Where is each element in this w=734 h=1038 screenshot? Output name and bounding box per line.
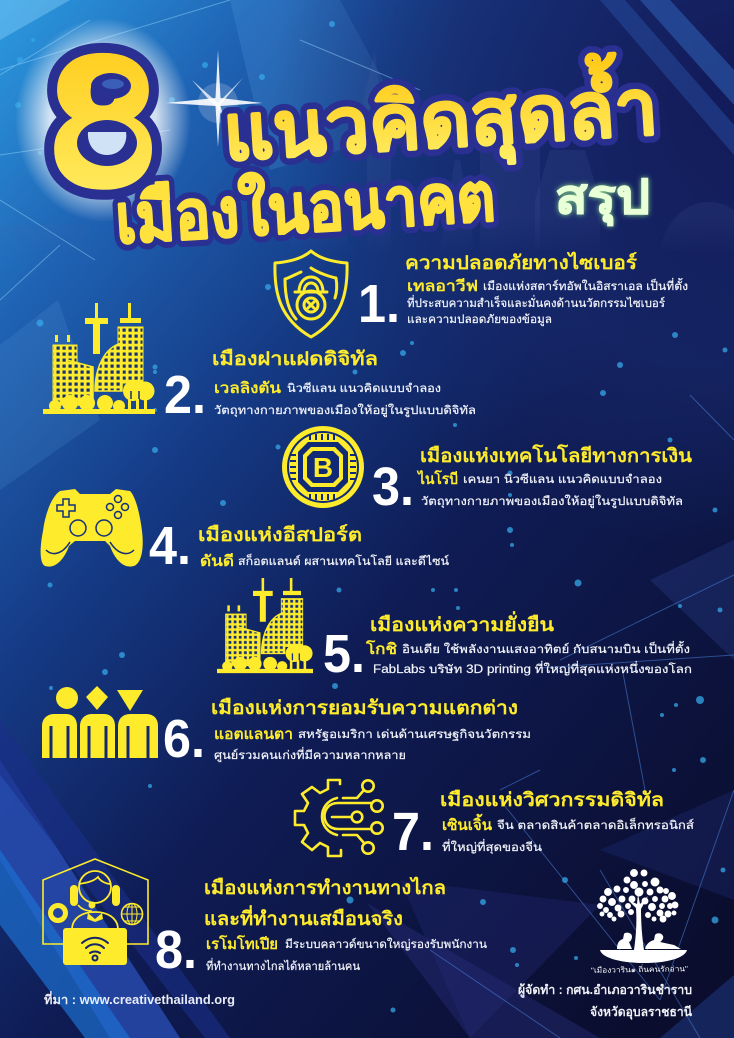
logo: reading tree: "เมืองวาริน๑ ถิ่นคนรักอ่าน" — [591, 963, 688, 975]
title: summary word: สรุป — [555, 170, 650, 226]
organizer credit: จังหวัดอุบลราชธานี — [590, 1005, 692, 1020]
icon: bitcoin chip coin: B — [313, 452, 333, 483]
body 3: วัตถุทางกายภาพของเมืองให้อยู่ในรูปแบบดิจิทัล — [421, 495, 683, 508]
body 5: FabLabs บริษัท 3D printing ที่ใหญ่ที่สุดแห่งหนึ่งของโลก — [373, 661, 692, 676]
source credit: ที่มา : www.creativethailand.org — [44, 991, 235, 1007]
title: line 1: แนวคิดสุดล้ำ — [220, 50, 661, 182]
organizer credit: ผู้จัดทำ : กศน.อำเภอวารินชำราบ — [518, 983, 692, 998]
body 1: เมืองแห่งสตาร์ทอัพในอิสราเอล เป็นที่ตั้ง — [483, 278, 688, 293]
body 3: เคนยา นิวซีแลน แนวคิดแบบจำลอง — [463, 473, 662, 486]
body 6: แอตแลนตา — [214, 726, 293, 743]
number 5: 5. — [323, 624, 365, 684]
body 7: ที่ใหญ่ที่สุดของจีน — [442, 839, 542, 854]
icon: shield lock — [275, 251, 347, 337]
title: 8: 8 — [52, 19, 154, 223]
title: 8 — [15, 18, 191, 223]
heading 3: เมืองแห่งเทคโนโลยีทางการเงิน — [420, 444, 692, 467]
heading 4: เมืองแห่งอีสปอร์ต — [198, 524, 362, 546]
body 5 — [365, 639, 692, 676]
icon: bitcoin chip coin — [282, 426, 364, 508]
body 8: มีระบบคลาวด์ขนาดใหญ่รองรับพนักงาน — [285, 937, 487, 951]
body 4: ดันดี — [200, 553, 234, 570]
panel: item 7 — [295, 780, 694, 862]
body 1: และความปลอดภัยของข้อมูล — [407, 313, 552, 326]
panel: item 4 — [41, 489, 449, 576]
number 8: 8. — [155, 920, 197, 980]
number 2: 2. — [164, 365, 206, 425]
heading 7: เมืองแห่งวิศวกรรมดิจิทัล — [440, 789, 664, 811]
body 6 — [214, 726, 531, 762]
body 1: ที่ประสบความสำเร็จและมั่นคงด้านนวัตกรรมไซเบอร์ — [407, 295, 665, 310]
number 6: 6. — [163, 709, 205, 769]
body 4 — [200, 553, 449, 570]
panel: item 6 — [42, 686, 531, 769]
logo: reading tree — [591, 870, 688, 975]
organizer credit — [518, 983, 692, 1020]
body 5: อินเดีย ใช้พลังงานแสงอาทิตย์ กับสนามบิน เป็นที่ตั้ง — [402, 641, 690, 656]
body 6: ศูนย์รวมคนเก่งที่มีความหลากหลาย — [214, 747, 406, 762]
title: line 2: เมืองในอนาคต — [113, 157, 497, 258]
body 8: เรโมโทเปีย — [206, 934, 278, 953]
body 8: ที่ทำงานทางไกลได้หลายล้านคน — [206, 958, 360, 973]
body 6: สหรัฐอเมริกา เด่นด้านเศรษฐกิจนวัตกรรม — [298, 728, 531, 741]
heading 8 — [204, 876, 446, 930]
number 1: 1. — [358, 274, 400, 334]
panel: item 8 — [43, 859, 487, 980]
body 7: เซินเจิ้น — [442, 813, 493, 834]
body 3: ไนโรบี — [416, 469, 458, 488]
body 4: สก็อตแลนด์ ผสานเทคโนโลยี และดีไซน์ — [238, 553, 449, 568]
icon: sustainable city — [217, 578, 313, 673]
heading 8: เมืองแห่งการทำงานทางไกล — [204, 876, 446, 899]
body 3 — [416, 469, 683, 508]
icon: digital twin city — [43, 303, 155, 414]
heading 6: เมืองแห่งการยอมรับความแตกต่าง — [211, 697, 518, 719]
heading 1: ความปลอดภัยทางไซเบอร์ — [405, 251, 638, 274]
body 2: วัตถุทางกายภาพของเมืองให้อยู่ในรูปแบบดิจิทัล — [214, 404, 476, 417]
body 8 — [206, 934, 487, 973]
body 1 — [407, 278, 688, 326]
panel: item 2 — [43, 303, 476, 425]
icon: star flare — [166, 50, 262, 147]
body 2: เวลลิงตัน — [214, 379, 282, 397]
icon: game controller — [41, 489, 143, 567]
panel: item 5 — [217, 578, 692, 684]
number 3: 3. — [372, 457, 414, 517]
title: 8: 8 — [52, 19, 154, 223]
panel: item 1 — [275, 251, 688, 337]
title: line 2: เมืองในอนาคต — [113, 157, 497, 258]
heading 2: เมืองฝาแฝดดิจิทัล — [212, 348, 378, 370]
body 7 — [442, 813, 694, 854]
heading 8: และที่ทำงานเสมือนจริง — [204, 905, 403, 930]
icon: diverse people — [42, 686, 158, 758]
icon: digital engineering gear — [295, 780, 383, 856]
body 2: นิวซีแลน แนวคิดแบบจำลอง — [287, 382, 441, 395]
number 7: 7. — [392, 802, 434, 862]
title: line 1: แนวคิดสุดล้ำ — [220, 50, 661, 182]
body 1: เทลอาวีฟ — [407, 278, 478, 295]
panel: item 3 — [282, 426, 692, 517]
city skyline silhouette — [0, 50, 734, 255]
number 4: 4. — [149, 516, 191, 576]
title: summary word: สรุป — [555, 170, 650, 226]
icon: remote worker — [43, 859, 148, 965]
heading 5: เมืองแห่งความยั่งยืน — [370, 611, 554, 636]
body 5: โกชิ — [365, 639, 397, 658]
body 7: จีน ตลาดสินค้าตลาดอิเล็กทรอนิกส์ — [497, 817, 694, 832]
body 2 — [214, 379, 476, 417]
